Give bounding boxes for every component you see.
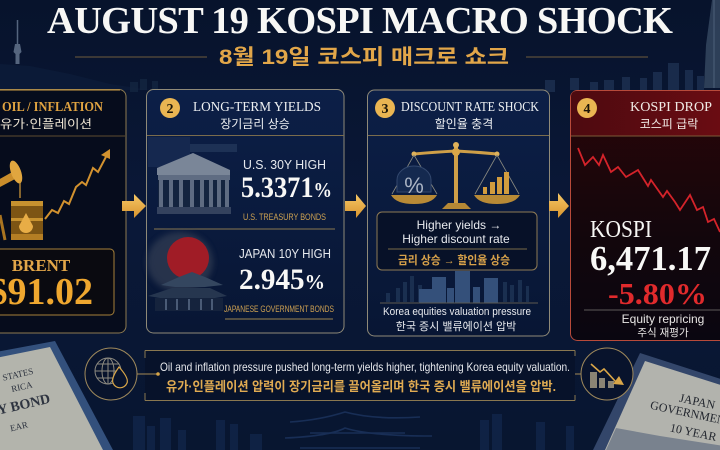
document: US treasury bond: RICA — [10, 379, 34, 394]
heading: oil inflation: OIL / INFLATION — [2, 99, 103, 114]
korean heading: discount rate shock: 할인율 충격 — [435, 117, 493, 131]
caption: valuation pressure: Korea equities valuation pressure — [383, 306, 531, 318]
box: higher yields: Higher yields → — [417, 218, 501, 232]
heading: KOSPI drop: KOSPI DROP — [630, 99, 712, 114]
caption: valuation pressure — [383, 306, 531, 333]
document: Japan government bond: JAPAN — [678, 391, 717, 412]
korean heading: KOSPI drop: 코스피 급락 — [640, 117, 698, 131]
stat: KOSPI value: -5.80% — [608, 276, 707, 311]
step badge 4 — [577, 98, 597, 118]
callout: brent price: BRENT — [12, 256, 71, 275]
stat: Japan 10Y: JAPANESE GOVERNMENT BONDS — [224, 304, 334, 314]
box: higher yields: Higher discount rate — [402, 232, 510, 246]
stat: US 30Y: U.S. TREASURY BONDS — [243, 212, 326, 222]
icon: falling chart — [575, 348, 633, 400]
document: US treasury bond — [0, 341, 113, 450]
heading: long-term yields: LONG-TERM YIELDS — [193, 99, 321, 114]
icon: globe and oil drop — [85, 348, 160, 400]
icon: balance scale: % — [404, 173, 424, 198]
step badge 3: 3 — [382, 102, 388, 117]
chart: rising price line — [45, 149, 110, 219]
stat: Japan 10Y — [224, 246, 334, 314]
caption: equity repricing: 주식 재평가 — [637, 327, 689, 339]
stat: KOSPI value: 6,471.17 — [590, 239, 711, 278]
document: Japan government bond: 10 YEAR — [669, 420, 718, 444]
title rule right — [526, 56, 648, 58]
icon: city skyline with candles — [386, 271, 529, 303]
stat: US 30Y: U.S. 30Y HIGH — [243, 157, 326, 172]
icon: Lotte Tower — [704, 0, 720, 88]
callout: brent price — [0, 249, 114, 315]
icon: N Seoul Tower — [14, 20, 22, 64]
stat: KOSPI value — [590, 217, 711, 311]
document: US treasury bond: STATES — [1, 366, 34, 383]
stat: KOSPI value: KOSPI — [590, 217, 652, 243]
panel: discount rate shock — [368, 90, 550, 336]
icon: balance scale — [391, 142, 520, 209]
document: Japan government bond — [593, 353, 720, 450]
stat: US 30Y — [241, 157, 332, 222]
title rule left — [75, 56, 207, 58]
panel: long-term yields — [146, 90, 344, 333]
panel: KOSPI drop — [570, 90, 720, 340]
stat: Japan 10Y: JAPAN 10Y HIGH — [239, 246, 331, 261]
icon: US treasury building — [148, 137, 237, 214]
panel: oil inflation — [0, 90, 126, 333]
step badge 3 — [375, 98, 395, 118]
title: AUGUST 19 KOSPI MACRO SHOCK — [47, 0, 673, 42]
korean heading: oil inflation: 유가·인플레이션 — [0, 117, 92, 131]
stat: Japan 10Y: 2.945% — [239, 263, 325, 296]
callout: macro summary: Oil and inflation pressure pushed long-term yields higher, tightening Korea equity valuation. — [160, 360, 570, 374]
arrow: step 1 to 2 — [122, 194, 146, 218]
subtitle: 8월 19일 코스피 매크로 쇼크 — [219, 46, 509, 69]
korean heading: long-term yields: 장기금리 상승 — [220, 117, 290, 131]
caption: equity repricing: Equity repricing — [622, 312, 704, 326]
document: US treasury bond: EAR — [9, 420, 29, 433]
stat: US 30Y: 5.3371% — [241, 171, 332, 204]
arrow: step 2 to 3 — [345, 194, 366, 218]
heading: discount rate shock: DISCOUNT RATE SHOCK — [401, 99, 539, 114]
caption: valuation pressure: 한국 증시 밸류에이션 압박 — [396, 320, 516, 333]
box: higher yields — [377, 212, 537, 270]
chart: falling index line — [578, 148, 720, 232]
step badge 4: 4 — [584, 102, 590, 117]
step badge 2 — [160, 98, 180, 118]
step badge 2: 2 — [166, 102, 174, 117]
caption: equity repricing — [622, 312, 704, 339]
icon: oil pump and barrel — [0, 159, 43, 240]
icon: Japan sun and temple — [147, 232, 227, 311]
callout: macro summary — [145, 350, 575, 400]
arrow: step 3 to 4 — [549, 193, 569, 218]
callout: macro summary: 유가·인플레이션 압력이 장기금리를 끌어올리며 한국 증시 밸류에이션을 압박. — [166, 379, 556, 394]
box: higher yields: 금리 상승 → 할인율 상승 — [398, 253, 510, 267]
